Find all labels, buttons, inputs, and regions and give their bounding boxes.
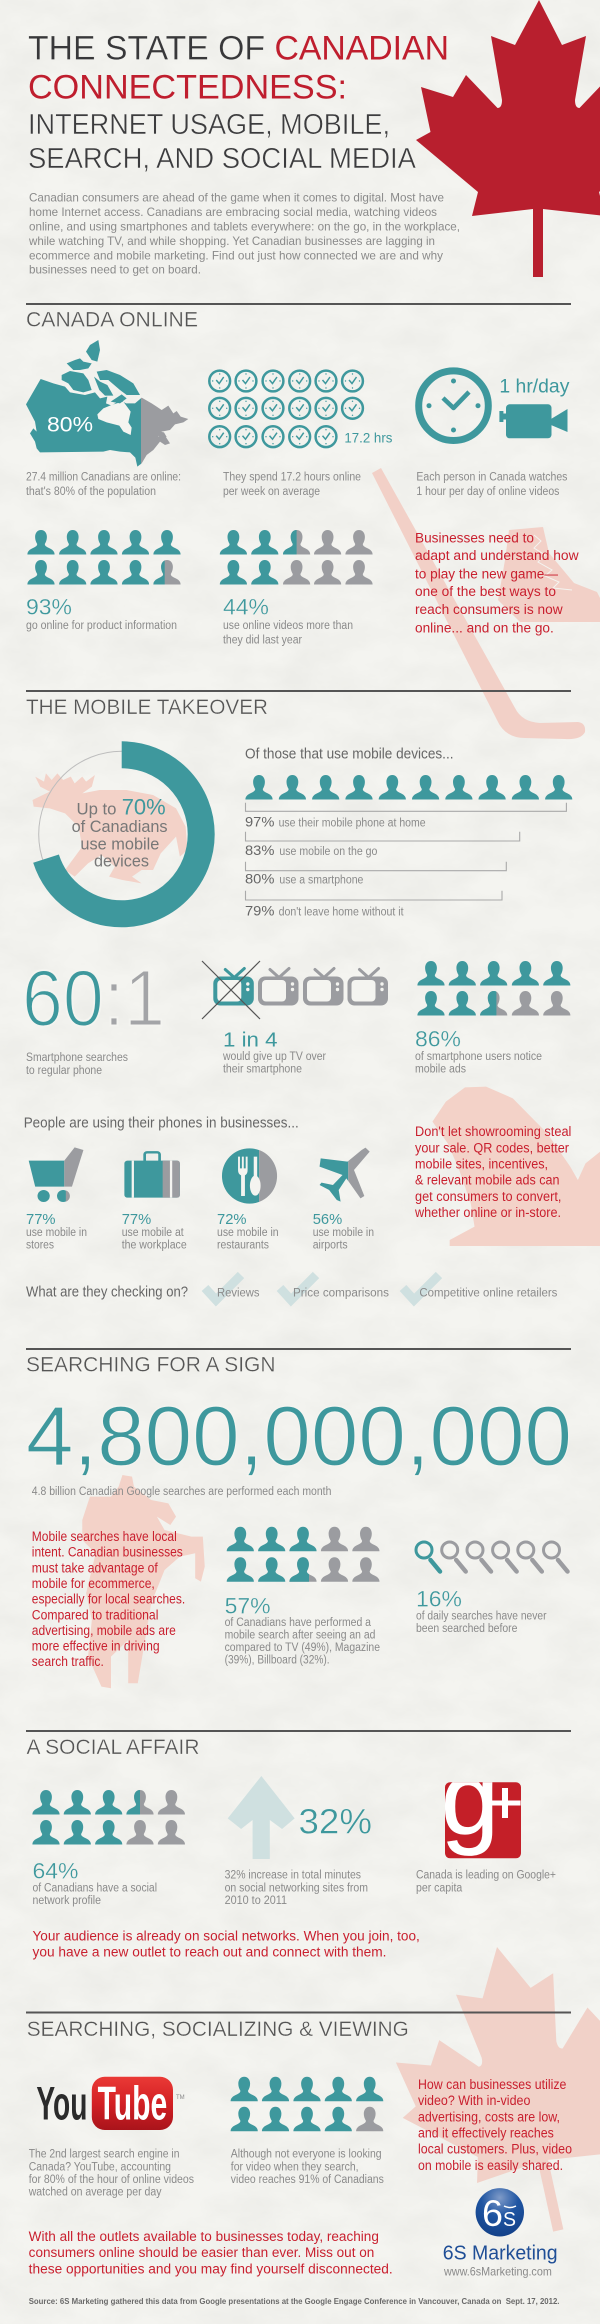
people chart: 64%: [32, 1790, 185, 1844]
logo: 6S Marketing: 6: [482, 2193, 503, 2234]
icon: Google Plus: [444, 1782, 521, 1858]
red callout: showrooming: mobile sites, incentives,: [415, 1157, 548, 1172]
donut chart: 70%: [39, 751, 205, 917]
logo: YouTube: Tube: [98, 2076, 167, 2129]
1 hr/day label: 1 hr/day: [499, 377, 570, 398]
stat: 86%: of smartphone users notice: [415, 1051, 542, 1063]
logo: 6S Marketing: [443, 2188, 558, 2278]
heading: Searching for a Sign: SEARCHING FOR A SIGN: [26, 1354, 276, 1377]
red callout: showrooming: get consumers to convert,: [415, 1189, 561, 1204]
stat: 93%: 93%: [26, 594, 72, 619]
stat: 60:1: 60:1: [22, 954, 165, 1043]
stat: 86%: 86%: [415, 1027, 461, 1052]
caption: social networking increase: 32% increase in total minutes: [225, 1870, 361, 1882]
caption: social networking increase: on social networking sites from: [225, 1882, 368, 1894]
heading: what are they checking on: What are they checking on?: [26, 1285, 188, 1301]
stat: 93%: [26, 594, 177, 632]
icon: Google Plus: g: [441, 1741, 499, 1857]
red callout: local intent: advertising, mobile ads are: [32, 1623, 176, 1638]
intro paragraph: businesses need to get on board.: [29, 262, 201, 276]
caption: videos per day: [416, 472, 568, 498]
logo: 6S Marketing: S: [503, 2209, 516, 2231]
stat: stores: stores: [26, 1240, 54, 1252]
donut chart: 70%: Up to: [76, 799, 116, 818]
red conclusion: consumers online should be easier than ever. Miss out on: [29, 2245, 374, 2260]
caption: Google Plus: [416, 1870, 556, 1894]
stat: airports: 56%: [313, 1211, 342, 1228]
red callout: showrooming: & relevant mobile ads can: [415, 1173, 560, 1188]
80%: [245, 870, 363, 886]
stat: 64%: 64%: [32, 1858, 78, 1883]
80%: 80%: [245, 870, 274, 886]
stat: 86%: [415, 1027, 542, 1076]
79%: [245, 902, 404, 918]
red callout: local intent: especially for local searches.: [32, 1592, 185, 1607]
83%: [245, 842, 377, 858]
red callout: video question: video? With in-video: [418, 2093, 530, 2108]
stat: 1 in 4: would give up TV over: [222, 1051, 326, 1063]
red callout: local intent: intent. Canadian businesses: [32, 1545, 183, 1560]
heading: Canada Online: CANADA ONLINE: [26, 309, 198, 332]
title: [28, 29, 449, 175]
red callout: local intent: mobile for ecommerce,: [32, 1576, 155, 1591]
caption: video reach: Although not everyone is looking: [231, 2149, 382, 2161]
heading: of those that use mobile devices: Of those that use mobile devices...: [245, 746, 454, 762]
stat: 57%: compared to TV (49%), Magazine: [225, 1642, 380, 1654]
caption: population online: [26, 472, 181, 498]
caption: YouTube: [28, 2149, 194, 2199]
caption: hours online: They spend 17.2 hours online: [223, 472, 361, 484]
checklist: price comparisons: Price comparisons: [293, 1288, 389, 1300]
stat: workplace: [122, 1211, 187, 1252]
80%: use a smartphone: [279, 874, 363, 886]
red callout: local intent: search traffic.: [32, 1654, 104, 1669]
red callout: video question: [418, 2077, 572, 2173]
icon: airplane: [320, 1148, 370, 1202]
icon: plate with fork and spoon: [222, 1148, 277, 1204]
red conclusion: With all the outlets available to businesses today, reaching: [29, 2229, 379, 2244]
donut chart: 70%: devices: [94, 853, 149, 871]
stat: 57%: [225, 1593, 380, 1667]
logo: YouTube: You: [36, 2076, 87, 2129]
heading: people are using their phones: People are using their phones in businesses...: [24, 1115, 299, 1131]
checklist: reviews: Reviews: [217, 1288, 260, 1300]
decorative faded maple leaf: [371, 1920, 600, 2258]
stat: restaurants: 72%: [217, 1211, 246, 1228]
stat: 93%: go online for product information: [26, 620, 177, 632]
stat: 57%: mobile search after seeing an ad: [225, 1630, 375, 1642]
donut chart: 70%: 70%: [122, 794, 166, 819]
stat: 57%: (39%), Billboard (32%).: [225, 1655, 330, 1667]
stat: 44%: use online videos more than: [223, 620, 353, 632]
decorative faded moose: [33, 773, 188, 883]
people chart: 86%: [417, 961, 570, 1016]
clock icons: [209, 371, 392, 447]
logo: YouTube: TM: [176, 2095, 185, 2101]
red callout: local intent: [32, 1529, 185, 1669]
source note: Source: 6S Marketing gathered this data from Google presentations at the Google Engage Conference in Vancouver, Canada on Sept. 17, 2012.: [29, 2296, 559, 2306]
red callout: businesses need to adapt: [415, 530, 579, 635]
red callout: showrooming: your sale. QR codes, better: [415, 1140, 569, 1155]
bracket chart: mobile usage percentages: [245, 803, 566, 918]
stat: 60:1: Smartphone searches: [26, 1052, 128, 1064]
caption: YouTube: for 80% of the hour of online videos: [29, 2174, 194, 2186]
icon: shopping cart: [29, 1147, 83, 1202]
caption: social networking increase: [225, 1870, 368, 1907]
stat: 44%: [223, 594, 353, 646]
stat: restaurants: restaurants: [217, 1240, 269, 1252]
caption: video reach: [231, 2149, 384, 2186]
stat: workplace: the workplace: [122, 1240, 187, 1252]
stat: restaurants: [217, 1211, 279, 1252]
stat: restaurants: use mobile in: [217, 1227, 279, 1239]
stat: 1 in 4: 1 in 4: [223, 1030, 278, 1052]
caption: YouTube: watched on average per day: [28, 2187, 162, 2199]
intro paragraph: [28, 191, 460, 276]
donut chart: 70%: use mobile: [80, 836, 159, 854]
big clock icon: [419, 371, 488, 441]
red callout: social networks: [32, 1929, 420, 1960]
red conclusion: these opportunities and you may find yourself disconnected.: [29, 2261, 393, 2276]
title: CONNECTEDNESS:: [28, 68, 347, 106]
red callout: local intent: Mobile searches have local: [32, 1529, 177, 1544]
caption: YouTube: Canada? YouTube, accounting: [29, 2161, 171, 2173]
people chart: 57%: [227, 1527, 380, 1582]
red callout: video question: local customers. Plus, video: [418, 2142, 572, 2157]
red callout: video question: advertising, costs are low,: [418, 2109, 560, 2124]
logo: 6S Marketing: www.6sMarketing.com: [443, 2264, 552, 2278]
stat: 44%: they did last year: [223, 634, 302, 646]
logo: YouTube: [36, 2076, 185, 2130]
decorative faded mountie on horse: [82, 1475, 205, 1688]
people chart: 91%: [231, 2077, 383, 2131]
red callout: showrooming: [414, 1124, 571, 1220]
heading: Searching, Socializing and Viewing: SEARCHING, SOCIALIZING & VIEWING: [27, 2018, 409, 2041]
stat: 16%: 16%: [416, 1587, 462, 1612]
stat: stores: [26, 1211, 87, 1252]
stat: 64%: [32, 1858, 157, 1907]
red callout: video question: and it effectively reaches: [418, 2125, 554, 2140]
stat: 1 in 4: [222, 1030, 326, 1076]
red callout: businesses need to adapt: one of the best ways to: [415, 584, 556, 599]
intro paragraph: ecommerce and mobile marketing. Find out just how connected we are and why: [29, 248, 443, 262]
intro paragraph: Canadian consumers are ahead of the game when it comes to digital. Most have: [29, 191, 444, 205]
caption: population online: 27.4 million Canadians are online:: [26, 472, 181, 484]
caption: social networking increase: 2010 to 2011: [225, 1895, 287, 1907]
logo: 6S Marketing: 6S Marketing: [443, 2242, 558, 2264]
red callout: video question: How can businesses utilize: [418, 2077, 566, 2092]
stat: 64%: network profile: [32, 1895, 101, 1907]
red callout: businesses need to adapt: adapt and understand how: [415, 548, 579, 563]
stat: 32%: 32%: [298, 1802, 372, 1841]
intro paragraph: while watching TV, and while shopping. Yet Canadian businesses are lagging in: [28, 234, 435, 248]
stat: 16%: been searched before: [416, 1623, 517, 1635]
stat: airports: use mobile in: [313, 1227, 374, 1239]
caption: hours online: [223, 472, 361, 498]
caption: videos per day: Each person in Canada watches: [416, 472, 568, 484]
83%: use mobile on the go: [279, 846, 377, 858]
red callout: local intent: must take advantage of: [32, 1560, 158, 1575]
red callout: local intent: more effective in driving: [32, 1638, 160, 1653]
caption: YouTube: The 2nd largest search engine in: [29, 2149, 180, 2161]
title: INTERNET USAGE, MOBILE,: [28, 109, 390, 141]
maple leaf: [416, 0, 600, 277]
stat: stores: use mobile in: [26, 1227, 87, 1239]
stat: airports: airports: [313, 1240, 348, 1252]
caption: Google Plus: per capita: [416, 1882, 463, 1894]
people chart: 44%: [220, 530, 373, 584]
magnifying glass icons: [416, 1542, 568, 1572]
79%: don't leave home without it: [279, 906, 404, 918]
caption: population online: that's 80% of the population: [26, 486, 156, 498]
red callout: showrooming: Don't let showrooming steal: [415, 1124, 571, 1139]
red callout: businesses need to adapt: online... and on the go.: [415, 620, 554, 635]
title: THE STATE OF CANADIAN: [28, 29, 449, 67]
stat: 1 in 4: their smartphone: [223, 1064, 302, 1076]
TV icons with cross: [202, 961, 388, 1019]
red callout: social networks: you have a new outlet to reach out and connect with them.: [32, 1945, 387, 1960]
97%: use their mobile phone at home: [279, 818, 426, 830]
red callout: businesses need to adapt: Businesses need to: [415, 530, 534, 545]
red callout: local intent: Compared to traditional: [32, 1607, 158, 1622]
red callout: businesses need to adapt: to play the new game—: [415, 566, 558, 581]
red callout: video question: on mobile is easily shared.: [418, 2158, 563, 2173]
97%: 97%: [245, 814, 274, 830]
83%: 83%: [245, 842, 274, 858]
people chart: 93%: [27, 530, 181, 584]
heading: The Mobile Takeover: THE MOBILE TAKEOVER: [26, 696, 268, 719]
clock icons: 17.2 hrs: [344, 429, 392, 445]
decorative faded hockey stick and skate: [372, 468, 600, 739]
up arrow: [228, 1776, 295, 1859]
stat: 16%: of daily searches have never: [416, 1610, 547, 1622]
big number: 4.8 billion: 4,800,000,000: [26, 1389, 572, 1483]
donut chart: 70%: of Canadians: [72, 818, 168, 836]
stat: 64%: of Canadians have a social: [32, 1882, 157, 1894]
checklist: competitive online retailers: [403, 1275, 558, 1300]
title: SEARCH, AND SOCIAL MEDIA: [28, 143, 417, 175]
video camera icon: [499, 404, 568, 438]
checklist: reviews: [205, 1275, 260, 1300]
stat: workplace: use mobile at: [122, 1227, 184, 1239]
red callout: showrooming: whether online or in-store.: [414, 1205, 561, 1220]
caption: videos per day: 1 hour per day of online videos: [416, 486, 560, 498]
stat: airports: [313, 1211, 374, 1252]
stat: 57%: 57%: [225, 1593, 271, 1618]
stat: stores: 77%: [26, 1211, 56, 1228]
checklist: price comparisons: [280, 1275, 389, 1300]
caption: hours online: per week on average: [223, 486, 320, 498]
intro paragraph: home Internet access. Canadians are embracing social media, watching videos: [29, 205, 437, 219]
red conclusion: [29, 2229, 393, 2276]
stat: 16%: [416, 1587, 547, 1635]
map of Canada: 80%: [47, 414, 93, 437]
stat: 57%: of Canadians have performed a: [225, 1617, 372, 1629]
caption: video reach: video reaches 91% of Canadians: [231, 2174, 384, 2186]
97%: [245, 814, 426, 830]
stat: 86%: mobile ads: [415, 1064, 466, 1076]
people row: ten figures: [245, 775, 572, 800]
red callout: social networks: Your audience is already on social networks. When you join, too,: [32, 1929, 420, 1944]
intro paragraph: online, and using smartphones and tablets everywhere: on the go, in the workplace,: [29, 220, 460, 234]
checklist: competitive online retailers: Competitive online retailers: [419, 1288, 558, 1300]
caption: Google Plus: Canada is leading on Google+: [416, 1870, 556, 1882]
map of Canada: [26, 340, 188, 467]
heading: A Social Affair: A SOCIAL AFFAIR: [26, 1736, 200, 1759]
red callout: businesses need to adapt: reach consumers is now: [415, 602, 563, 617]
stat: workplace: 77%: [122, 1211, 151, 1228]
stat: 60:1: to regular phone: [26, 1065, 102, 1077]
stat: 44%: 44%: [223, 594, 269, 619]
caption: searches per month: 4.8 billion Canadian Google searches are performed each month: [32, 1486, 331, 1498]
caption: video reach: for video when they search,: [231, 2161, 359, 2173]
decorative faded beaver: [432, 1087, 600, 1246]
79%: 79%: [245, 902, 274, 918]
icon: suitcase: [124, 1152, 180, 1198]
